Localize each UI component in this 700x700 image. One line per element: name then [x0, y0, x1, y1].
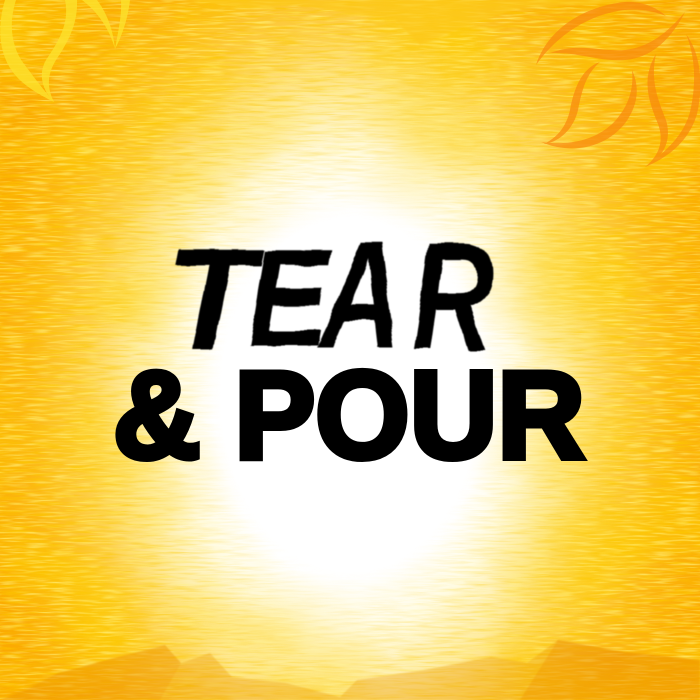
title: TEAR — [166, 209, 494, 383]
title: TEAR: A — [316, 209, 403, 381]
torn paper strip: bottom mountains — [0, 640, 700, 700]
title: & POUR: & POUR — [113, 347, 585, 485]
icon: yellow leaf outline, top left — [0, 0, 130, 102]
icon: orange leaf outline, top right — [536, 2, 700, 167]
torn paper strip: top — [190, 0, 640, 45]
title: TEAR: T — [166, 218, 265, 380]
title: TEAR: E — [247, 220, 332, 376]
title: TEAR: R — [412, 209, 494, 383]
